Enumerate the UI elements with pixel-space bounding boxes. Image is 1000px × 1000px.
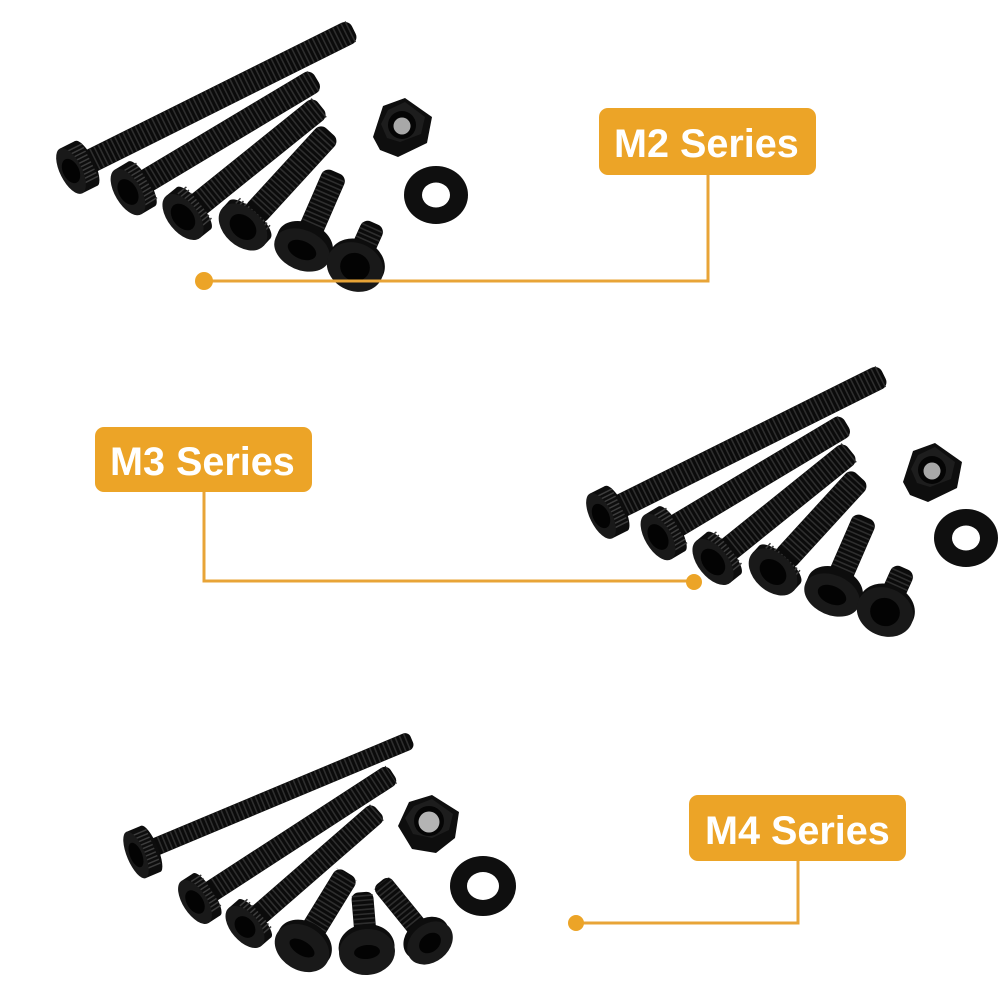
panel: M2 series hardware photo [50,8,468,301]
M2 bolt 3 [154,85,338,247]
M2 bolt 1 [50,8,365,198]
M4 bolt 6 [361,866,461,973]
connector dot: M2 [195,272,213,290]
M3 washer [934,509,998,567]
M3 bolt 3 [684,430,868,592]
M4 bolt 1 [118,717,421,882]
M4 bolt 2 [171,752,407,930]
M2 bolt 4 [210,113,351,260]
M3 bolt 2 [633,402,860,566]
label: M2 Series: M2 Series [614,122,799,166]
label: M2 Series [599,108,816,175]
M4 hex nut [398,795,459,853]
label: M4 Series [689,795,906,861]
connector: M4 line [576,860,798,923]
panel: M3 series hardware photo [580,353,998,646]
M2 bolt 6 [319,211,401,301]
M4 bolt 4 [266,858,373,982]
label: M3 Series: M3 Series [110,440,295,484]
connector dot: M3 [686,574,702,590]
label: M3 Series [95,427,312,492]
M2 washer [404,166,468,224]
M3 hex nut [903,443,962,502]
connector: M2 line [204,174,708,281]
M3 bolt 6 [849,556,931,646]
panel: M4 series hardware photo [118,717,516,982]
connector: M3 line [204,491,695,581]
M4 bolt 5 [334,890,397,977]
connector dot: M4 [568,915,584,931]
M2 bolt 2 [103,57,330,221]
M3 bolt 5 [797,505,892,625]
label: M4 Series: M4 Series [705,809,890,853]
M3 bolt 4 [740,458,881,605]
M3 bolt 1 [580,353,895,543]
M4 bolt 3 [218,792,395,955]
M2 hex nut [373,98,432,157]
M2 bolt 5 [267,160,362,280]
M4 washer [450,856,516,916]
